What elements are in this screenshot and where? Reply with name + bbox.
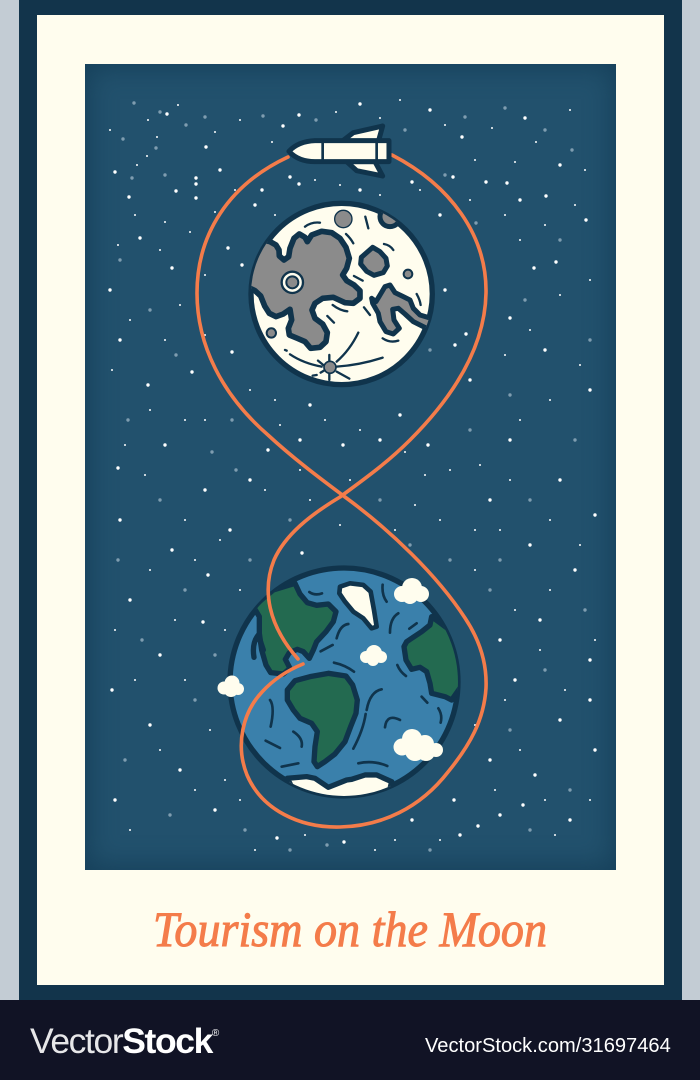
rocket body [289,141,389,162]
cloud: left [218,676,244,697]
watermark logo: VectorStock® [30,1021,219,1061]
cloud: centre [360,645,387,666]
illustration [108,99,597,947]
rocket [289,126,389,176]
continents [253,583,463,803]
rocket fins [342,126,383,142]
star field [110,100,595,850]
moon [247,203,437,385]
moon disc [251,203,432,385]
cloud: lower right [394,729,443,761]
watermark url: VectorStock.com/31697464 [425,1035,671,1057]
title: Tourism on the Moon [153,901,547,957]
watermark bar [0,1000,700,1080]
orbit path [197,155,486,827]
clouds [218,578,443,761]
moon craters and maria [247,207,437,380]
panel: starry sky [85,64,616,870]
cloud: top right [394,578,429,604]
earth disc [230,568,458,796]
earth [230,568,463,803]
